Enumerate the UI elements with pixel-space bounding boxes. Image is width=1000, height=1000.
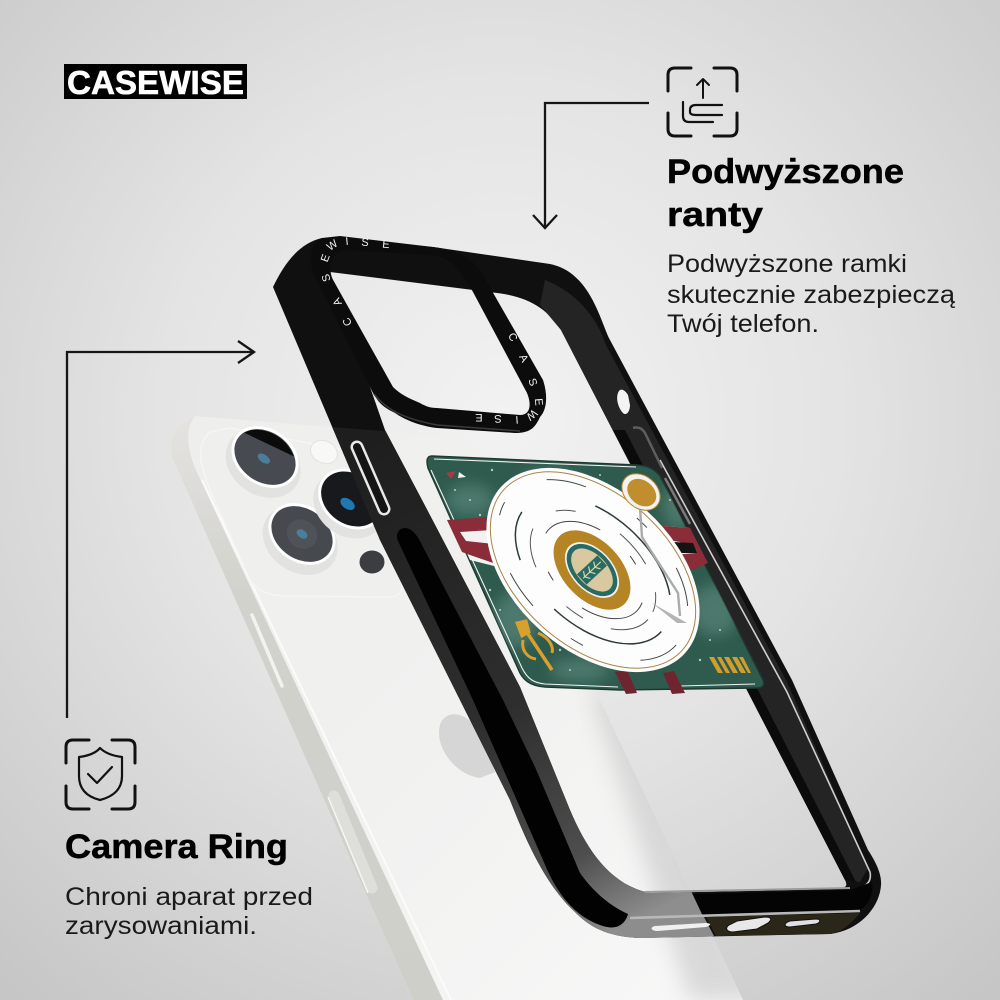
heading: Podwyższone ranty: Podwyższone — [667, 153, 904, 191]
sticker speckles — [454, 469, 741, 671]
ring engraved text: E — [319, 253, 333, 264]
port: speaker left — [652, 923, 710, 931]
right band fill — [540, 280, 868, 882]
ring engraved text: S — [361, 237, 369, 249]
ring engraved text: A — [330, 295, 345, 308]
ring engraved text — [319, 236, 544, 425]
text block: raised edges description — [667, 250, 955, 338]
phone side edge — [171, 416, 443, 1000]
apple logo — [439, 714, 495, 778]
right band inner strip — [613, 430, 856, 882]
black slot in left band — [397, 528, 628, 927]
back sticker artwork — [426, 455, 764, 694]
side button lower — [334, 796, 372, 888]
ring engraved text: W — [325, 237, 341, 254]
lidar sensor — [359, 550, 385, 574]
text block: camera ring description: Chroni aparat przed — [65, 883, 313, 911]
ring engraved text: S — [494, 412, 502, 424]
logo: CASEWISE: CASEWISE — [67, 64, 244, 101]
ring engraved text: S — [320, 272, 334, 283]
small triangles — [446, 471, 456, 479]
sticker mottling — [446, 470, 739, 682]
ring engraved text: E — [475, 411, 483, 423]
bottom edge grey over phone — [600, 917, 714, 938]
black notch — [673, 542, 697, 553]
bottom light line — [630, 911, 860, 918]
side highlight — [202, 480, 451, 1000]
right band highlight — [660, 460, 870, 889]
small gold circle — [615, 466, 667, 518]
side button ring fill — [357, 447, 384, 509]
icon: shield check — [66, 740, 135, 809]
text block: raised edges description: skutecznie zabezpieczą — [667, 281, 955, 309]
case body — [273, 238, 881, 938]
heading: Camera Ring: Camera Ring — [65, 828, 288, 866]
gold bars — [709, 657, 751, 673]
bottom inner grey line — [645, 888, 850, 892]
side button ring outline — [357, 447, 384, 509]
second button — [665, 478, 690, 524]
small side cut-out — [617, 390, 630, 414]
sticker green panel — [427, 456, 764, 690]
ring engraved text: W — [523, 406, 539, 423]
camera lens 3 — [300, 455, 400, 552]
phone: white back with camera — [171, 412, 760, 1000]
ring engraved text: I — [515, 413, 519, 425]
red leg left — [615, 670, 637, 694]
stem line — [640, 508, 680, 616]
sticker inner edge lines — [431, 459, 755, 687]
phone body — [171, 416, 743, 1000]
soft reflection on back — [590, 690, 760, 1000]
medallion — [539, 516, 645, 624]
ring engraved text: A — [516, 352, 531, 365]
ring engraved text: S — [525, 377, 539, 388]
text block: camera ring description — [65, 883, 313, 940]
ring body — [311, 236, 546, 433]
ring engraved text: C — [505, 331, 519, 344]
text block: raised edges description: Twój telefon. — [667, 310, 819, 338]
phone case frame — [273, 238, 881, 938]
red stripe right — [650, 525, 708, 574]
white gap left — [452, 518, 510, 570]
camera plateau — [201, 428, 402, 597]
red stripe left — [447, 517, 502, 566]
stem fin — [652, 603, 687, 623]
text block: camera ring description: zarysowaniami. — [65, 912, 257, 940]
white disc — [447, 428, 739, 712]
ring engraved text: C — [341, 315, 355, 328]
ring bevel highlight — [374, 394, 520, 431]
bottom edge olive — [706, 913, 860, 936]
icon: raised edges — [668, 68, 737, 136]
bottom black strip — [693, 882, 872, 914]
mandalorian emblem — [517, 621, 552, 670]
red leg right — [663, 671, 685, 694]
port: speaker right — [785, 919, 820, 927]
arrow: to camera ring — [67, 341, 254, 718]
flash — [307, 436, 341, 468]
side button upper — [252, 615, 282, 686]
heading: Podwyższone ranty — [667, 153, 904, 234]
heading: Podwyższone ranty: ranty — [667, 196, 763, 234]
camera lens 1 — [212, 412, 315, 512]
port: usb — [727, 917, 771, 932]
ring engraved text: E — [382, 239, 390, 251]
camera ring — [311, 236, 546, 433]
arrow: to raised edges — [533, 103, 649, 228]
white gap right — [650, 525, 700, 565]
long side button — [633, 427, 662, 468]
lower button highlight — [328, 797, 368, 893]
band over phone — [332, 427, 713, 938]
camera lens 2 — [249, 489, 352, 589]
ring engraved text: E — [532, 398, 544, 406]
ring engraved text: I — [345, 236, 349, 248]
text block: raised edges description: Podwyższone ramki — [667, 250, 907, 278]
